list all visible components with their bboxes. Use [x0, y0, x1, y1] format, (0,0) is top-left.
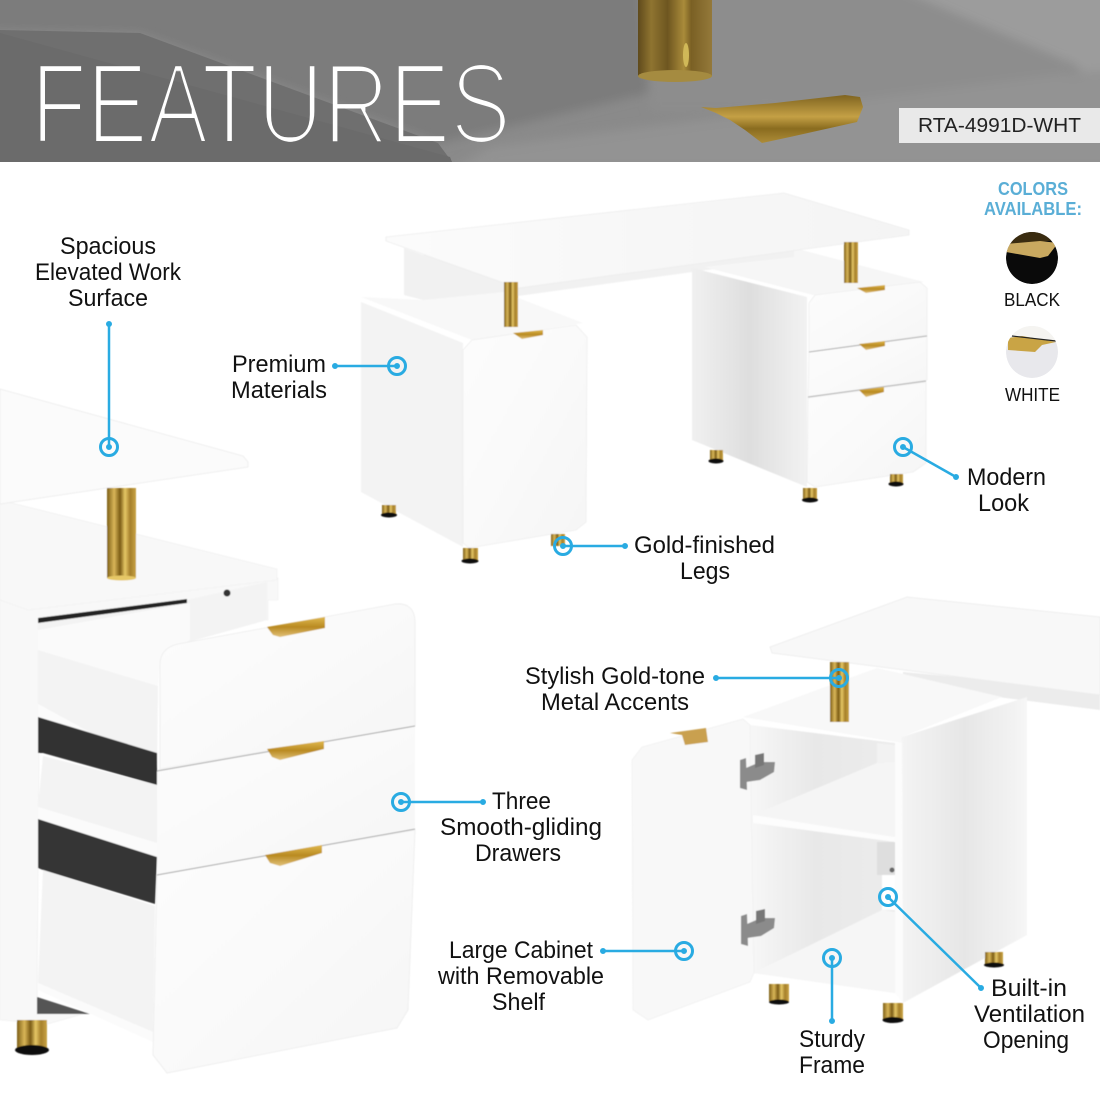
legs [769, 952, 1004, 1023]
callout: elevated work surface: Spacious [60, 233, 156, 260]
callout: premium materials [231, 351, 406, 404]
callout: modern look: Look [978, 490, 1030, 517]
callout: elevated work surface [35, 233, 182, 456]
callout: premium materials: Materials [231, 377, 327, 404]
callout: ventilation opening: Built-in [991, 975, 1067, 1002]
colors heading: COLORS [998, 179, 1068, 199]
interior [750, 725, 903, 1003]
right pedestal [692, 248, 927, 487]
callout: elevated work surface: Elevated Work [35, 259, 182, 286]
callout: ventilation opening: Opening [983, 1027, 1069, 1054]
back panel [404, 248, 794, 300]
header banner [0, 0, 1100, 170]
cabinet left face and frame [0, 578, 278, 1024]
hinge [740, 753, 775, 790]
callout: three drawers: Three [492, 788, 551, 815]
gold post [107, 488, 136, 580]
callout: sturdy frame: Sturdy [799, 1026, 865, 1053]
callout: large cabinet [437, 937, 692, 1016]
model number tag [899, 108, 1100, 143]
product: front desk view [361, 193, 927, 564]
callout: three drawers: Drawers [475, 840, 561, 867]
callout: ventilation opening [880, 888, 1085, 1054]
label: white: WHITE [1005, 385, 1060, 405]
drawer sides [37, 603, 190, 1042]
callout: gold-finished legs [554, 532, 775, 585]
gold posts and handles [504, 242, 885, 397]
callout: gold-tone metal accents: Stylish Gold-tone [525, 663, 705, 690]
callout: sturdy frame [799, 950, 865, 1079]
colors heading: AVAILABLE: [984, 199, 1082, 219]
desk top corner [0, 389, 248, 504]
cabinet top [743, 668, 1002, 743]
door handle [670, 728, 708, 745]
right side [902, 697, 1027, 1003]
gold leg photo [638, 0, 712, 82]
callout: three drawers: Smooth-gliding [440, 814, 602, 841]
callout: large cabinet: Large Cabinet [449, 937, 593, 964]
callout: large cabinet: Shelf [492, 989, 545, 1016]
callout: ventilation opening: Ventilation [974, 1001, 1085, 1028]
callout: gold-tone metal accents [525, 663, 848, 716]
desk top [386, 193, 909, 288]
callout: gold-finished legs: Legs [680, 558, 730, 585]
inside of cabinet [38, 582, 267, 650]
callout: sturdy frame: Frame [799, 1052, 865, 1079]
gold post [830, 662, 849, 722]
title: FEATURES [31, 41, 511, 168]
swatch: white [1006, 326, 1058, 378]
desk top [770, 597, 1100, 695]
leg [15, 1020, 49, 1055]
callout: modern look [894, 438, 1046, 517]
model number tag: RTA-4991D-WHT [918, 115, 1081, 137]
callout: gold-tone metal accents: Metal Accents [541, 689, 689, 716]
hinge [741, 909, 775, 946]
legs [381, 450, 904, 564]
callout: three drawers [392, 788, 602, 867]
swatch: black [1006, 232, 1058, 284]
callout: large cabinet: with Removable [437, 963, 604, 990]
label: black: BLACK [1004, 290, 1060, 310]
callout: modern look: Modern [967, 464, 1046, 491]
callout: gold-finished legs: Gold-finished [634, 532, 775, 559]
callout: elevated work surface: Surface [68, 285, 148, 312]
gold handle photo [701, 95, 863, 143]
product: open drawers view [0, 389, 415, 1073]
callout: premium materials: Premium [232, 351, 326, 378]
product: open cabinet view [632, 597, 1100, 1023]
colors heading [984, 179, 1082, 219]
drawer fronts [153, 604, 415, 1073]
drawer handles [265, 617, 325, 866]
left pedestal [361, 292, 587, 548]
colors panel [984, 179, 1082, 405]
back panel under top [903, 672, 1100, 710]
door [632, 719, 754, 1020]
